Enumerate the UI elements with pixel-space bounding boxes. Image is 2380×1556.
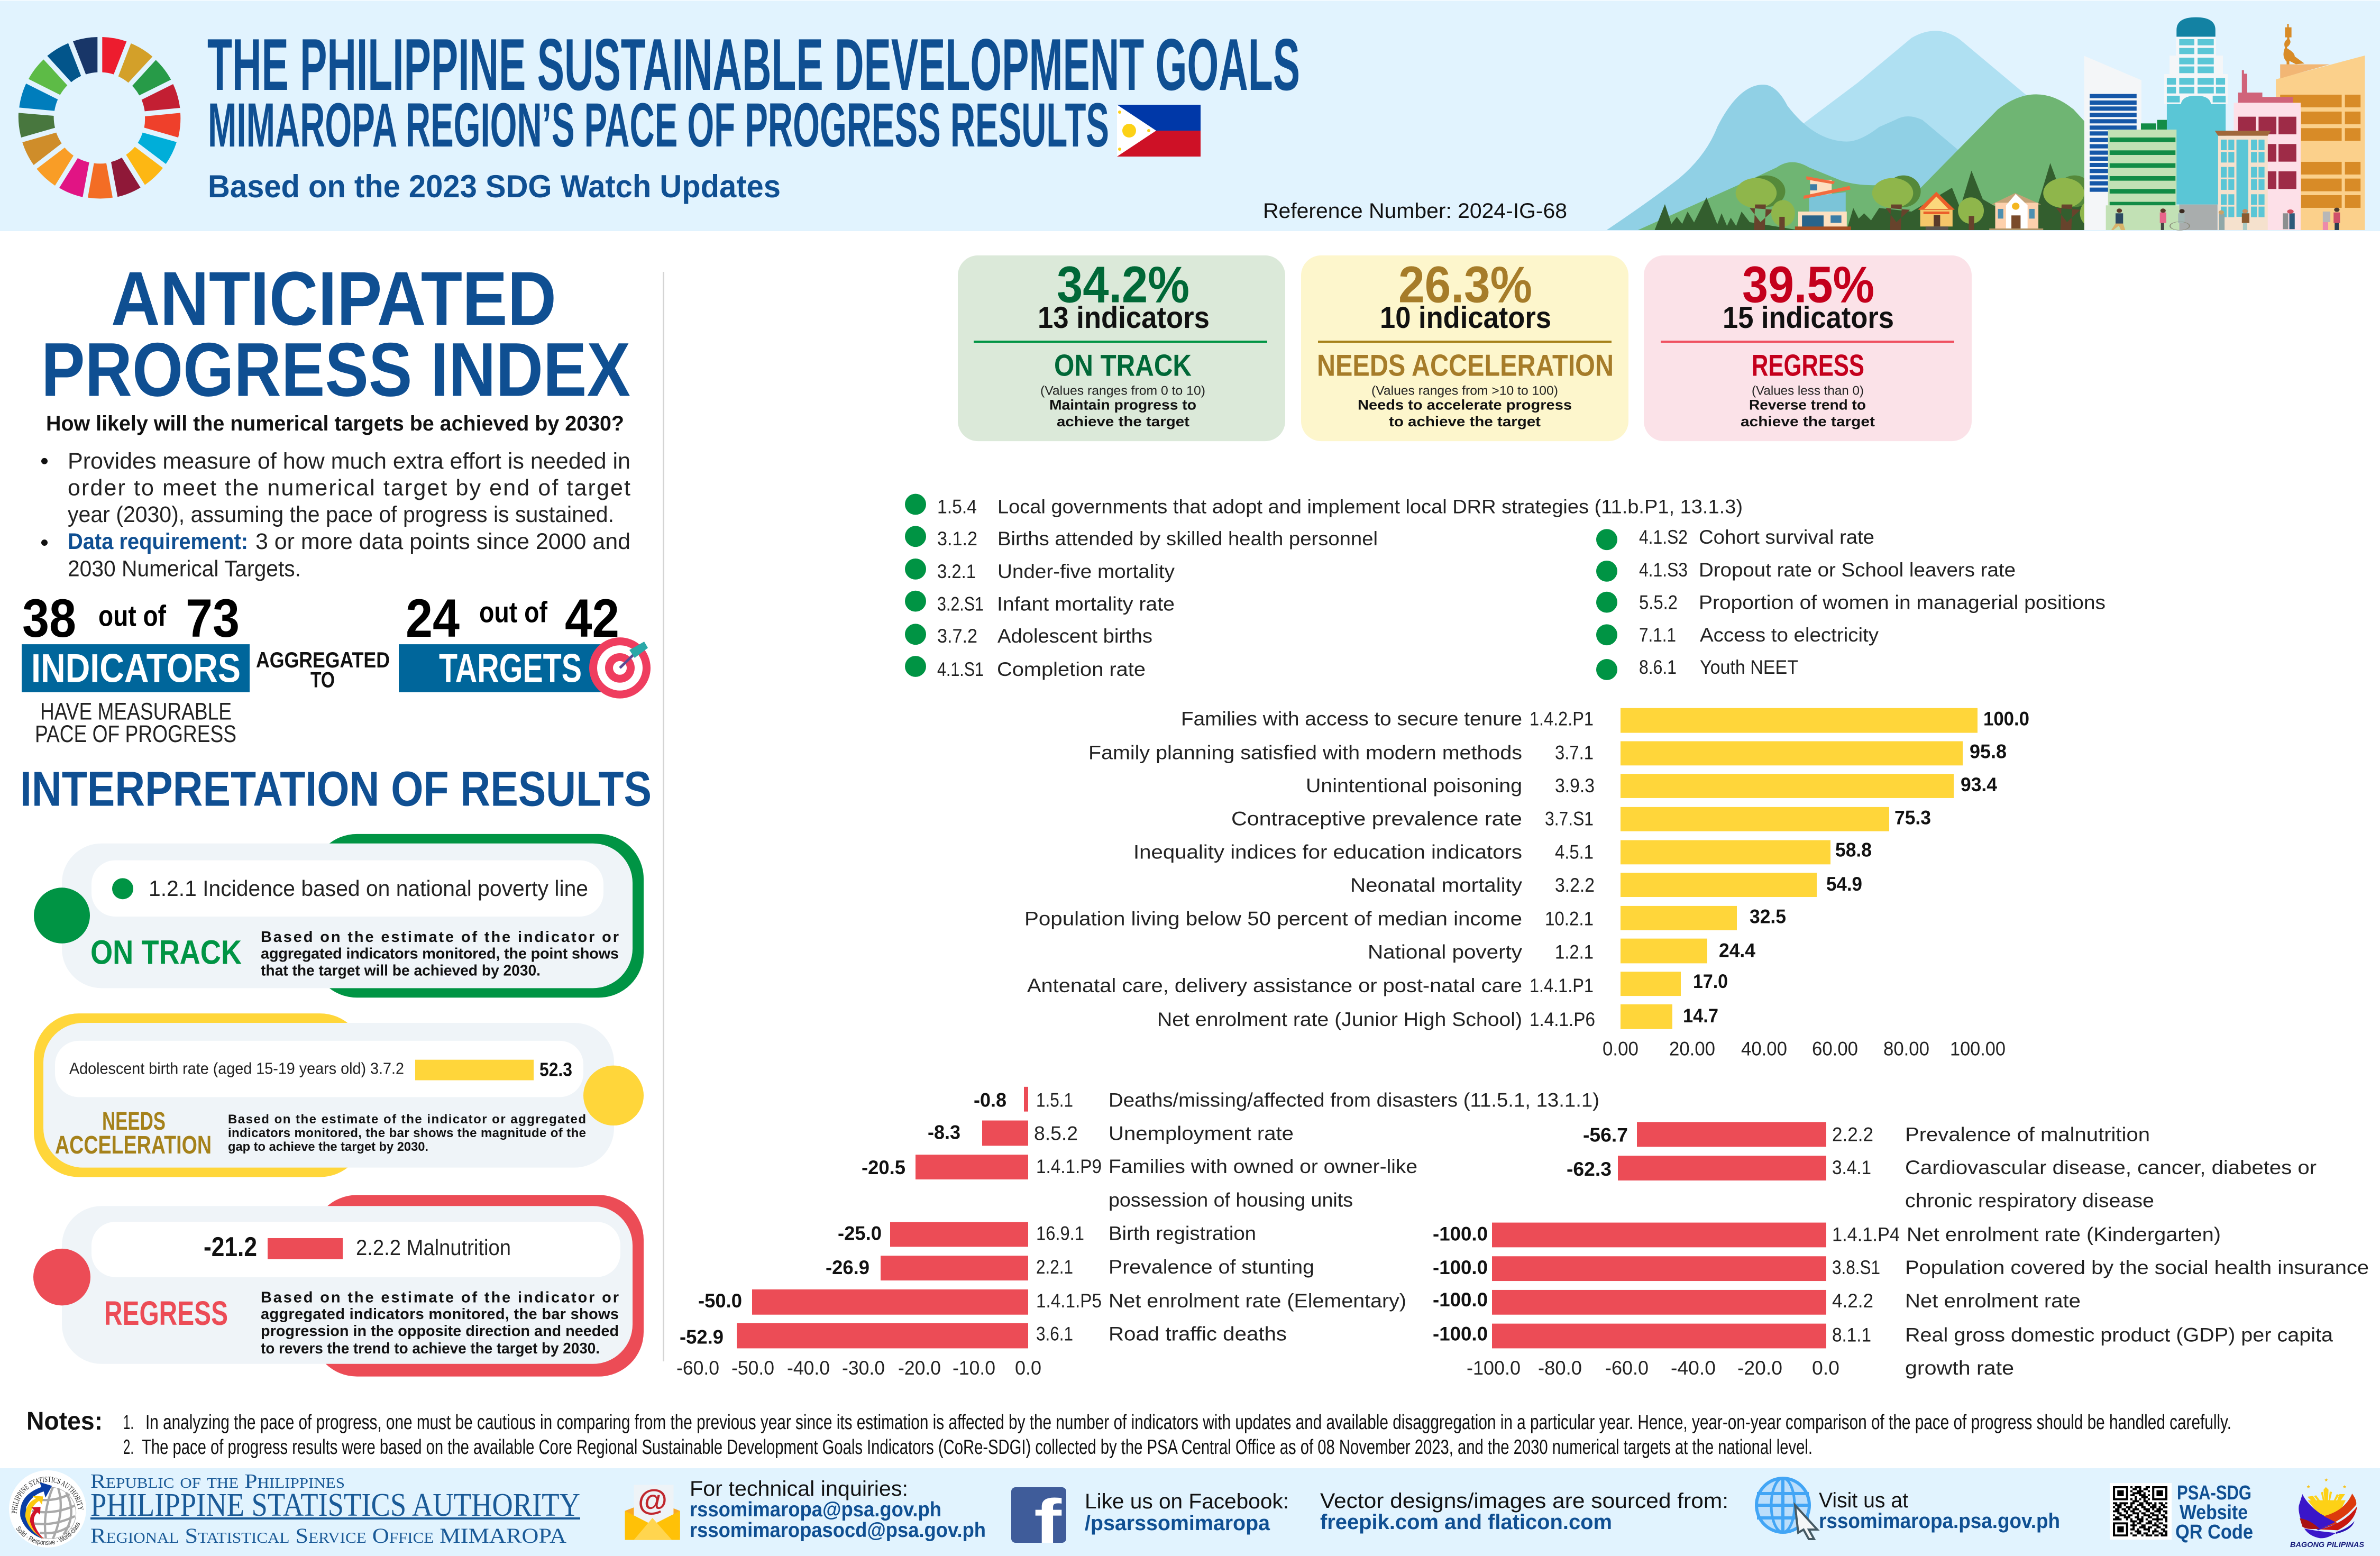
bar values: -52.9 bbox=[680, 1326, 724, 1348]
image credits bbox=[1320, 1489, 1728, 1534]
bar values: -62.3 bbox=[1567, 1158, 1612, 1180]
card: needs acceleration: ACCELERATION bbox=[55, 1131, 212, 1159]
on-track indicator list: Local governments that adopt and implement local DRR strategies (11.b.P1, 13.1.3) bbox=[997, 496, 1743, 517]
on-track indicator list: Under-five mortality bbox=[997, 561, 1175, 582]
row labels: chronic respiratory disease bbox=[1905, 1190, 2154, 1212]
row labels: 3.7.1 bbox=[1555, 742, 1594, 763]
summary card: needs acceleration: 26.3% bbox=[1398, 256, 1532, 313]
row labels: 3.6.1 bbox=[1036, 1323, 1073, 1344]
description bullets: year (2030), assuming the pace of progress is sustained. bbox=[68, 502, 614, 527]
houses bbox=[1795, 176, 2043, 230]
row labels: 4.2.2 bbox=[1832, 1290, 1873, 1312]
summary card: needs acceleration: NEEDS ACCELERATION bbox=[1317, 349, 1614, 383]
aggregated to label: AGGREGATED bbox=[256, 647, 390, 672]
on-track indicator list bbox=[905, 494, 2106, 680]
bar chart: needs acceleration indicators bbox=[1024, 708, 2029, 1059]
reference number: Reference Number: 2024-IG-68 bbox=[1263, 199, 1567, 223]
bars bbox=[1492, 1122, 1826, 1348]
bar values: 58.8 bbox=[1835, 839, 1872, 861]
QR code caption: QR Code bbox=[2175, 1521, 2253, 1543]
row labels: Prevalence of stunting bbox=[1109, 1256, 1314, 1278]
row labels: 3.2.2 bbox=[1555, 874, 1595, 896]
pedestrians bbox=[2111, 208, 2340, 230]
card: regress: progression in the opposite direction and needed bbox=[261, 1323, 619, 1340]
row labels: growth rate bbox=[1905, 1357, 2014, 1379]
description bullets: 3 or more data points since 2000 and bbox=[255, 529, 630, 554]
bar values: -50.0 bbox=[698, 1290, 742, 1312]
Facebook contact: Like us on Facebook: bbox=[1085, 1490, 1289, 1513]
card: on track: that the target will be achieved by 2030. bbox=[261, 963, 541, 979]
header band bbox=[0, 1, 2380, 231]
icon: PSA seal bbox=[9, 1470, 86, 1548]
bar values: -56.7 bbox=[1583, 1124, 1628, 1146]
axis labels: 0.00 bbox=[1603, 1038, 1638, 1059]
row labels: Unintentional poisoning bbox=[1306, 775, 1522, 797]
summary card: on track: (Values ranges from 0 to 10) bbox=[1040, 384, 1205, 398]
summary card: on track: 13 indicators bbox=[1038, 301, 1210, 335]
icon: email envelope: @ bbox=[638, 1483, 667, 1516]
mountains bbox=[1607, 31, 2090, 230]
row labels: Unemployment rate bbox=[1109, 1122, 1294, 1144]
axis labels: -40.0 bbox=[1671, 1357, 1716, 1379]
technical inquiries contact: rssomimaropasocd@psa.gov.ph bbox=[690, 1519, 986, 1542]
axis labels: -10.0 bbox=[953, 1357, 995, 1379]
row labels: Net enrolment rate (Junior High School) bbox=[1157, 1009, 1522, 1030]
description bullets bbox=[41, 449, 630, 582]
summary card: on track: ON TRACK bbox=[1054, 349, 1192, 383]
row labels: 3.4.1 bbox=[1832, 1157, 1871, 1178]
image credits: freepik.com and flaticon.com bbox=[1320, 1511, 1612, 1534]
notes: 2. bbox=[123, 1436, 134, 1459]
row labels: Birth registration bbox=[1109, 1223, 1256, 1244]
row labels: Neonatal mortality bbox=[1350, 874, 1523, 896]
Facebook contact: /psarssomimaropa bbox=[1085, 1512, 1270, 1535]
on-track indicator list: Births attended by skilled health personnel bbox=[997, 528, 1378, 550]
axis labels: -60.0 bbox=[1605, 1357, 1649, 1379]
on-track indicator list: 3.2.S1 bbox=[937, 593, 984, 615]
row labels: Families with access to secure tenure bbox=[1181, 708, 1522, 730]
card: needs acceleration: gap to achieve the target by 2030. bbox=[228, 1140, 428, 1154]
summary card: on track: Maintain progress to bbox=[1049, 397, 1196, 413]
row labels: Antenatal care, delivery assistance or post-natal care bbox=[1027, 975, 1522, 996]
row labels: possession of housing units bbox=[1109, 1189, 1353, 1211]
notes: The pace of progress results were based on the available Core Regional Sustainable Development Goals Indicators (CoRe-SDGI) collected by the PSA Central Office as of 08 November 2023, and the 2030 numerical targets at the national level. bbox=[142, 1436, 1813, 1459]
axis labels: 40.00 bbox=[1741, 1038, 1787, 1059]
on-track indicator list: Adolescent births bbox=[997, 625, 1152, 647]
card: regress: 2.2.2 Malnutrition bbox=[356, 1235, 511, 1260]
stat: 24 out of 42 targets bbox=[399, 588, 651, 699]
row labels: Population living below 50 percent of median income bbox=[1024, 908, 1522, 930]
bar values: -26.9 bbox=[826, 1257, 869, 1278]
row labels: Cardiovascular disease, cancer, diabetes or bbox=[1905, 1157, 2317, 1178]
summary card: regress bbox=[1644, 255, 1972, 441]
axis labels: 20.00 bbox=[1669, 1038, 1715, 1059]
technical inquiries contact: rssomimaropa@psa.gov.ph bbox=[690, 1498, 941, 1521]
green dots bbox=[905, 494, 1617, 680]
row labels: 1.4.1.P1 bbox=[1530, 975, 1594, 996]
bar values bbox=[680, 1090, 1006, 1348]
summary card: needs acceleration: to achieve the target bbox=[1389, 414, 1541, 429]
summary card: regress: Reverse trend to bbox=[1749, 397, 1866, 413]
description bullets: order to meet the numerical target by end of target bbox=[68, 475, 630, 500]
heading: anticipated progress index bbox=[41, 255, 630, 412]
row labels: 1.5.1 bbox=[1036, 1090, 1073, 1111]
card: needs acceleration: 52.3 bbox=[539, 1059, 572, 1080]
bar values: 95.8 bbox=[1970, 740, 2007, 762]
axis labels: -40.0 bbox=[787, 1357, 830, 1379]
axis labels: 0.0 bbox=[1812, 1357, 1839, 1379]
bar values: 100.0 bbox=[1983, 708, 2029, 730]
row labels bbox=[1024, 708, 1595, 1030]
stat: 38 out of 73 indicators: INDICATORS bbox=[31, 646, 241, 691]
bar values bbox=[1433, 1124, 1628, 1344]
bar values: -100.0 bbox=[1433, 1223, 1488, 1244]
stat: 38 out of 73 indicators: out of bbox=[98, 599, 166, 632]
card: needs acceleration: indicators monitored, the bar shows the magnitude of the bbox=[228, 1126, 586, 1140]
summary card: needs acceleration bbox=[1301, 255, 1628, 441]
on-track indicator list: Dropout rate or School leavers rate bbox=[1699, 559, 2016, 581]
bar values: 93.4 bbox=[1961, 774, 1997, 795]
on-track indicator list: 3.2.1 bbox=[937, 561, 976, 582]
divider between left panel and results bbox=[663, 272, 664, 1361]
stat: 24 out of 42 targets: 42 bbox=[565, 588, 619, 648]
notes: 1. bbox=[123, 1411, 134, 1434]
axis labels: -20.0 bbox=[1737, 1357, 1782, 1379]
on-track indicator list: 4.1.S3 bbox=[1639, 559, 1688, 581]
axis labels: 60.00 bbox=[1812, 1038, 1858, 1059]
icon: target with arrow bbox=[589, 637, 651, 699]
footer band bbox=[0, 1468, 2380, 1556]
heading: anticipated progress index: ANTICIPATED bbox=[111, 255, 556, 341]
aggregated to label bbox=[256, 647, 390, 692]
axis labels bbox=[1467, 1357, 1839, 1379]
bar values: -100.0 bbox=[1433, 1257, 1488, 1278]
QR code caption bbox=[2175, 1482, 2253, 1543]
row labels: 1.4.1.P9 bbox=[1036, 1156, 1102, 1177]
question: How likely will the numerical targets be achieved by 2030? bbox=[46, 412, 624, 435]
on-track indicator list: Infant mortality rate bbox=[997, 593, 1175, 615]
summary card: needs acceleration: Needs to accelerate progress bbox=[1358, 397, 1572, 413]
bar chart: regress indicators, left bbox=[676, 1087, 1599, 1379]
bars bbox=[1621, 708, 1978, 1029]
stat: 24 out of 42 targets: TARGETS bbox=[439, 646, 582, 691]
axis labels: 0.0 bbox=[1015, 1357, 1041, 1379]
stat: 38 out of 73 indicators bbox=[22, 588, 250, 747]
agency name bbox=[90, 1470, 580, 1548]
on-track indicator list: 1.5.4 bbox=[937, 496, 977, 517]
summary card: regress: 15 indicators bbox=[1723, 301, 1894, 335]
bar values: 32.5 bbox=[1750, 906, 1786, 928]
bar values: -0.8 bbox=[974, 1090, 1006, 1111]
summary card: needs acceleration: 10 indicators bbox=[1380, 301, 1551, 335]
icon: Facebook bbox=[1011, 1487, 1066, 1556]
card: needs acceleration: NEEDS bbox=[102, 1107, 166, 1136]
skyline buildings bbox=[2084, 17, 2365, 230]
row labels: 1.4.1.P6 bbox=[1530, 1009, 1595, 1030]
card: on track: aggregated indicators monitored, the point shows bbox=[261, 946, 619, 963]
on-track indicator list: Cohort survival rate bbox=[1699, 526, 1874, 548]
row labels: 3.7.S1 bbox=[1545, 808, 1594, 830]
card: on track: Based on the estimate of the indicator or bbox=[261, 929, 619, 946]
card: needs acceleration: Based on the estimate of the indicator or aggregated bbox=[228, 1112, 586, 1127]
summary card: on track: 34.2% bbox=[1057, 256, 1189, 313]
row labels: 10.2.1 bbox=[1545, 908, 1594, 930]
on-track indicator list: Access to electricity bbox=[1700, 624, 1879, 646]
on-track indicator list: 5.5.2 bbox=[1639, 592, 1678, 614]
axis labels: -100.0 bbox=[1467, 1357, 1521, 1379]
row labels bbox=[1832, 1123, 2369, 1379]
subtitle: Based on the 2023 SDG Watch Updates bbox=[208, 169, 781, 204]
card: regress: to revers the trend to achieve the target by 2030. bbox=[261, 1340, 600, 1357]
panel: anticipated progress index bbox=[20, 255, 652, 817]
stat: 38 out of 73 indicators: 38 bbox=[22, 588, 76, 648]
row labels: Family planning satisfied with modern methods bbox=[1088, 742, 1522, 763]
row labels: 3.9.3 bbox=[1555, 775, 1595, 797]
row labels: Road traffic deaths bbox=[1109, 1323, 1287, 1344]
summary card: on track: achieve the target bbox=[1057, 414, 1189, 429]
bar values: 17.0 bbox=[1693, 971, 1728, 992]
row labels: Deaths/missing/affected from disasters (11.5.1, 13.1.1) bbox=[1109, 1090, 1599, 1111]
bar values: -20.5 bbox=[862, 1157, 905, 1178]
row labels: Real gross domestic product (GDP) per capita bbox=[1905, 1324, 2333, 1346]
bars bbox=[737, 1087, 1028, 1348]
description bullets: 2030 Numerical Targets. bbox=[68, 556, 301, 582]
bar values: -8.3 bbox=[928, 1121, 960, 1143]
stat: 24 out of 42 targets: 24 bbox=[406, 588, 460, 648]
axis labels: -50.0 bbox=[731, 1357, 774, 1379]
website contact: rssomimaropa.psa.gov.ph bbox=[1819, 1509, 2060, 1533]
on-track indicator list: 4.1.S2 bbox=[1639, 526, 1688, 548]
icon: globe with cursor bbox=[1756, 1478, 1817, 1539]
icon: Philippine flag bbox=[1117, 105, 1201, 157]
axis labels: -30.0 bbox=[842, 1357, 885, 1379]
card: needs acceleration: Adolescent birth rate (aged 15-19 years old) 3.7.2 bbox=[69, 1059, 404, 1078]
icon: QR code bbox=[2110, 1483, 2172, 1540]
QR code caption: PSA-SDG bbox=[2177, 1482, 2251, 1504]
row labels: 8.5.2 bbox=[1034, 1122, 1078, 1144]
stat: 24 out of 42 targets: out of bbox=[479, 595, 547, 628]
bar values: 75.3 bbox=[1894, 807, 1931, 829]
axis labels: -80.0 bbox=[1538, 1357, 1582, 1379]
on-track indicator list: Proportion of women in managerial positions bbox=[1699, 592, 2106, 614]
on-track indicator list: 3.7.2 bbox=[937, 625, 977, 647]
heading: interpretation of results: INTERPRETATION OF RESULTS bbox=[20, 762, 652, 817]
pine forest bbox=[1655, 163, 2085, 230]
bar chart: regress indicators, right bbox=[1433, 1122, 2369, 1379]
axis labels: -20.0 bbox=[898, 1357, 941, 1379]
card: regress: REGRESS bbox=[104, 1294, 228, 1332]
row labels: 1.4.2.P1 bbox=[1530, 708, 1594, 730]
bar values: 54.9 bbox=[1826, 873, 1862, 895]
row labels: 8.1.1 bbox=[1832, 1324, 1871, 1346]
row labels: 2.2.1 bbox=[1036, 1256, 1073, 1278]
axis labels: 80.00 bbox=[1883, 1038, 1929, 1059]
on-track indicator list: 4.1.S1 bbox=[937, 658, 984, 680]
title bbox=[207, 24, 1300, 160]
axis labels: -60.0 bbox=[676, 1357, 719, 1379]
description bullets: Provides measure of how much extra effort is needed in bbox=[68, 449, 630, 474]
website contact bbox=[1819, 1489, 2060, 1533]
image credits: Vector designs/images are sourced from: bbox=[1320, 1489, 1728, 1513]
agency name: Republic of the Philippines bbox=[90, 1470, 345, 1493]
row labels: 1.2.1 bbox=[1555, 941, 1594, 963]
on-track indicator list: Youth NEET bbox=[1700, 656, 1798, 678]
bar values bbox=[1683, 708, 2029, 1027]
row labels: 2.2.2 bbox=[1832, 1123, 1873, 1145]
summary card: regress: REGRESS bbox=[1752, 349, 1864, 383]
row labels: Prevalence of malnutrition bbox=[1905, 1123, 2150, 1145]
summary card: regress: (Values less than 0) bbox=[1752, 384, 1864, 398]
card: needs acceleration bbox=[34, 1013, 644, 1177]
row labels: 3.8.S1 bbox=[1832, 1257, 1880, 1278]
axis labels: 100.00 bbox=[1950, 1038, 2006, 1059]
aggregated to label: TO bbox=[310, 667, 335, 692]
agency name: Regional Statistical Service Office MIMAROPA bbox=[90, 1524, 566, 1548]
row labels bbox=[1034, 1090, 1599, 1344]
notes bbox=[26, 1407, 2231, 1459]
row labels: 4.5.1 bbox=[1555, 841, 1594, 863]
agency name: PHILIPPINE STATISTICS AUTHORITY bbox=[90, 1487, 580, 1523]
Facebook contact bbox=[1085, 1490, 1289, 1535]
on-track indicator list: 3.1.2 bbox=[937, 528, 977, 550]
card: on track bbox=[34, 834, 644, 997]
summary card: regress: achieve the target bbox=[1741, 414, 1875, 429]
row labels: National poverty bbox=[1368, 941, 1523, 963]
bar values: -100.0 bbox=[1433, 1323, 1488, 1344]
axis labels bbox=[676, 1357, 1041, 1379]
icon: email envelope bbox=[625, 1483, 680, 1540]
QR code caption: Website bbox=[2180, 1502, 2248, 1524]
stat: 38 out of 73 indicators: 73 bbox=[186, 588, 240, 648]
technical inquiries contact: For technical inquiries: bbox=[690, 1477, 908, 1500]
stat: 38 out of 73 indicators: PACE OF PROGRESS bbox=[35, 720, 236, 747]
illustration: mountains, town and city skyline bbox=[1607, 17, 2365, 230]
title: MIMAROPA REGION’S PACE OF PROGRESS RESULTS bbox=[208, 90, 1109, 160]
card: on track: 1.2.1 Incidence based on national poverty line bbox=[149, 876, 588, 901]
summary card: regress: 39.5% bbox=[1742, 256, 1874, 313]
row labels: Contraceptive prevalence rate bbox=[1231, 808, 1522, 830]
technical inquiries contact bbox=[690, 1477, 986, 1542]
heading: anticipated progress index: PROGRESS INDEX bbox=[41, 327, 630, 412]
row labels: Families with owned or owner-like bbox=[1109, 1156, 1417, 1177]
row labels: 1.4.1.P5 bbox=[1036, 1290, 1102, 1312]
card: regress: -21.2 bbox=[204, 1231, 257, 1262]
card: regress bbox=[33, 1195, 644, 1377]
summary card: needs acceleration: (Values ranges from >10 to 100) bbox=[1371, 384, 1558, 398]
summary card: on track bbox=[958, 255, 1285, 441]
icon: Facebook: f bbox=[1034, 1487, 1062, 1556]
notes: Notes: bbox=[26, 1407, 103, 1435]
row labels: Net enrolment rate bbox=[1905, 1290, 2081, 1312]
row labels: 16.9.1 bbox=[1036, 1223, 1084, 1244]
row labels: 1.4.1.P4 bbox=[1832, 1223, 1900, 1245]
trees bbox=[1736, 176, 2104, 230]
stat: 38 out of 73 indicators: HAVE MEASURABLE bbox=[40, 697, 232, 725]
description bullets: Data requirement: bbox=[68, 529, 248, 554]
website contact: Visit us at bbox=[1819, 1489, 1908, 1512]
row labels: Population covered by the social health insurance bbox=[1905, 1257, 2369, 1278]
title: THE PHILIPPINE SUSTAINABLE DEVELOPMENT GOALS bbox=[207, 24, 1300, 106]
card: regress: aggregated indicators monitored, the bar shows bbox=[261, 1306, 619, 1323]
bar values: 14.7 bbox=[1683, 1005, 1718, 1027]
bar values: -25.0 bbox=[838, 1223, 882, 1244]
on-track indicator list: 8.6.1 bbox=[1639, 656, 1677, 678]
bar values: 24.4 bbox=[1719, 940, 1755, 961]
axis labels bbox=[1603, 1038, 2006, 1059]
row labels: Inequality indices for education indicators bbox=[1133, 841, 1522, 863]
icon: PSA seal: Solid · Responsive · World-class bbox=[16, 1522, 80, 1545]
on-track indicator list: Completion rate bbox=[997, 658, 1146, 680]
on-track indicator list: 7.1.1 bbox=[1639, 624, 1676, 646]
icon: Bagong Pilipinas logo: BAGONG PILIPINAS bbox=[2290, 1540, 2365, 1549]
icon: SDG colour wheel bbox=[19, 37, 180, 198]
card: regress: Based on the estimate of the indicator or bbox=[261, 1289, 619, 1306]
row labels: Net enrolment rate (Kindergarten) bbox=[1907, 1223, 2221, 1245]
card: on track: ON TRACK bbox=[90, 933, 242, 972]
row labels: Net enrolment rate (Elementary) bbox=[1109, 1290, 1406, 1312]
bar values: -100.0 bbox=[1433, 1289, 1488, 1311]
icon: PSA seal: PHILIPPINE STATISTICS AUTHORITY bbox=[12, 1477, 84, 1514]
icon: Bagong Pilipinas logo bbox=[2290, 1478, 2365, 1549]
